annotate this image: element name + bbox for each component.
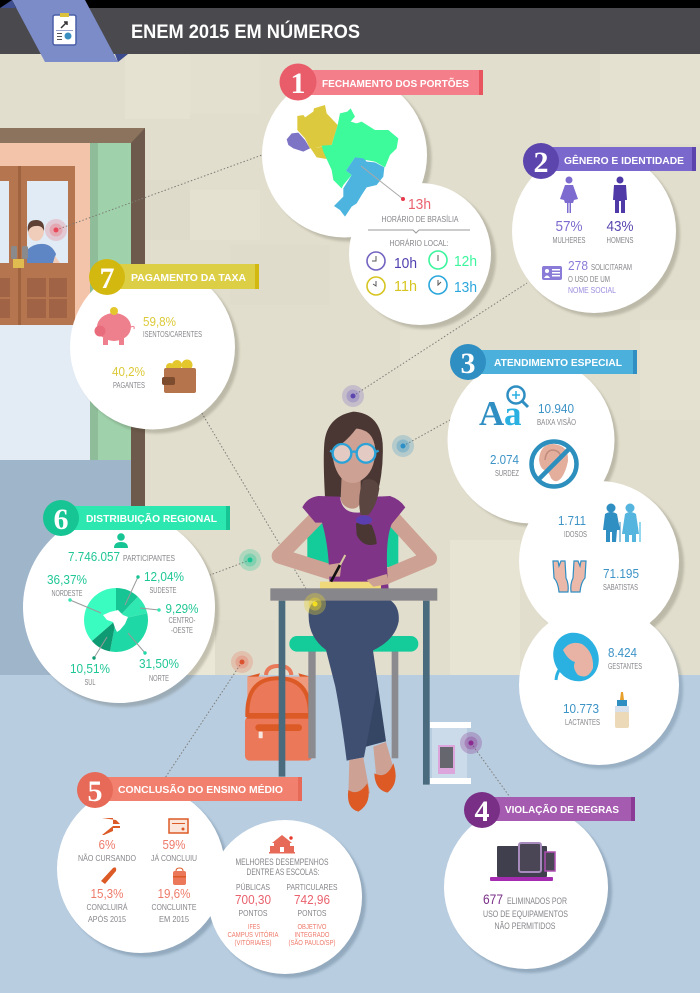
glasses <box>330 444 379 463</box>
icon: baby bottle <box>615 692 629 728</box>
nome social text: O USO DE UM <box>568 275 610 284</box>
baixa visão: 10.940 <box>538 401 574 416</box>
nome social text <box>568 258 632 295</box>
particulares: OBJETIVO <box>298 922 327 931</box>
públicas: IFES <box>248 922 260 931</box>
region labels: NORTE <box>149 674 169 683</box>
Brasília time: HORÁRIO DE BRASÍLIA <box>382 215 459 224</box>
local times <box>394 253 477 296</box>
lactantes: 10.773 <box>563 701 599 716</box>
hotspot: panel 7 <box>304 593 326 615</box>
heading 7: PAGAMENTO DA TAXA <box>131 272 246 284</box>
shirt <box>302 496 405 589</box>
idosos <box>558 513 587 539</box>
Brasília pointer <box>361 166 405 201</box>
públicas: (VITÓRIA/ES) <box>234 938 272 947</box>
melhores desempenhos: DENTRE AS ESCOLAS: <box>246 867 320 877</box>
local times: 13h <box>454 279 477 296</box>
eliminados text: USO DE EQUIPAMENTOS <box>483 909 568 919</box>
heading 1: 1 <box>290 67 306 100</box>
concluinte em 2015 <box>152 886 197 924</box>
particulares: PONTOS <box>298 908 327 918</box>
surdez <box>490 452 519 478</box>
header bar <box>0 0 700 62</box>
panel 2: gênero e identidade <box>512 143 696 317</box>
gender figures: 43% <box>606 218 634 235</box>
Brasília time: HORÁRIO LOCAL: <box>390 239 448 248</box>
region labels: 12,04% <box>144 569 184 584</box>
panel 7: pagamento da taxa <box>70 259 259 434</box>
sabatistas: 71.195 <box>603 566 639 581</box>
legs and shoes <box>348 742 396 812</box>
nome social text: SOLICITARAM <box>591 263 632 272</box>
local times: 10h <box>394 255 417 272</box>
hair fringe <box>329 418 380 452</box>
nome social text: NOME SOCIAL <box>568 286 616 295</box>
concluinte em 2015: EM 2015 <box>159 914 189 924</box>
hotspot: panel 3 <box>392 435 414 457</box>
region labels: 10,51% <box>70 661 110 676</box>
não cursando: NÃO CURSANDO <box>78 853 136 863</box>
icon: exit door <box>102 818 120 835</box>
particulares <box>286 882 338 947</box>
region labels <box>47 569 199 687</box>
icon: laptop, tablet and phone <box>490 843 555 881</box>
pie chart <box>84 588 148 652</box>
já concluiu <box>151 837 197 863</box>
region labels: -OESTE <box>171 626 193 635</box>
já concluiu: 59% <box>162 837 186 852</box>
region labels: 31,50% <box>139 656 179 671</box>
panel 1: fechamento dos portões <box>262 64 496 329</box>
hotspot: panel 6 <box>239 549 261 571</box>
isentos/carentes: 59,8% <box>143 314 176 329</box>
heading 4: 4 <box>474 795 490 828</box>
neck and face <box>332 428 375 509</box>
heading 4: VIOLAÇÃO DE REGRAS <box>505 803 619 816</box>
sabatistas <box>603 566 639 592</box>
region labels: SUL <box>84 678 96 687</box>
panel 3: atendimento especial <box>448 344 684 769</box>
pie leader lines <box>68 575 161 660</box>
concluinte em 2015: 19,6% <box>158 886 191 901</box>
hotspot: panel 4 <box>460 732 482 754</box>
hotspot: panel 1 <box>45 219 67 241</box>
particulares: PARTICULARES <box>286 882 338 892</box>
públicas: CAMPUS VITÓRIA <box>228 930 278 939</box>
heading 4 <box>464 792 635 828</box>
eliminados text: NÃO PERMITIDOS <box>494 921 556 931</box>
isentos/carentes <box>143 314 202 339</box>
region labels: 9,29% <box>166 601 199 616</box>
heading 7 <box>89 259 259 295</box>
concluirá após 2015: APÓS 2015 <box>88 914 126 924</box>
icon: pen <box>101 867 116 884</box>
gender figures <box>552 218 634 245</box>
surdez: 2.074 <box>490 452 519 467</box>
icon: wallet with coins <box>162 360 196 393</box>
hotspots <box>45 219 482 754</box>
desk <box>270 588 437 785</box>
pagantes: PAGANTES <box>113 381 145 390</box>
heading 5: 5 <box>88 775 102 808</box>
sabatistas: SABATISTAS <box>603 583 638 592</box>
isentos/carentes: ISENTOS/CARENTES <box>143 330 202 339</box>
icon: certificate <box>169 819 188 833</box>
eliminados text: 677 <box>483 891 503 907</box>
icon: clipboard <box>53 13 76 45</box>
nome social text: 278 <box>568 258 588 273</box>
Brasília time: 13h <box>408 196 431 213</box>
pagantes <box>112 364 145 390</box>
region labels: 36,37% <box>47 572 87 587</box>
concluirá após 2015 <box>86 886 128 924</box>
heading 2 <box>523 143 696 179</box>
icon: praying hands <box>553 561 586 592</box>
participantes <box>68 549 175 564</box>
heading 2: GÊNERO E IDENTIDADE <box>564 154 684 167</box>
icon: crossed ear <box>532 442 576 486</box>
baixa visão <box>537 401 576 427</box>
panel 6: distribuição regional <box>23 500 230 707</box>
particulares: INTEGRADO <box>294 930 330 939</box>
lactantes <box>563 701 600 727</box>
icon: Aa magnifier: a <box>504 394 522 433</box>
particulares: (SÃO PAULO/SP) <box>288 938 336 947</box>
heading 5: CONCLUSÃO DO ENSINO MÉDIO <box>118 783 283 796</box>
gender figures: HOMENS <box>606 236 634 245</box>
participantes: 7.746.057 <box>68 549 120 564</box>
gender figures: 57% <box>556 218 582 235</box>
heading 6: DISTRIBUIÇÃO REGIONAL <box>86 512 218 525</box>
title: ENEM 2015 EM NÚMEROS <box>131 21 360 43</box>
local times: 11h <box>394 278 417 295</box>
locker with phone <box>430 722 471 784</box>
idosos: IDOSOS <box>564 530 587 539</box>
não cursando <box>78 837 136 863</box>
region labels: SUDESTE <box>150 586 176 595</box>
heading 6 <box>43 500 230 536</box>
já concluiu: JÁ CONCLUIU <box>151 853 197 863</box>
pagantes: 40,2% <box>112 364 145 379</box>
hotspot: panel 5 <box>231 651 253 673</box>
door and entrance <box>0 128 145 675</box>
padlock <box>11 246 28 268</box>
heading 5 <box>77 772 302 808</box>
person behind the gate <box>27 220 60 263</box>
student illustration <box>245 412 437 812</box>
icon: piggy bank <box>94 307 134 345</box>
dotted connector lines <box>56 155 527 800</box>
participantes: PARTICIPANTES <box>123 554 175 563</box>
gestantes: GESTANTES <box>608 662 642 671</box>
eliminados text: ELIMINADOS POR <box>507 896 567 906</box>
map of Brazil by time zone <box>287 105 398 217</box>
backpack <box>245 666 312 761</box>
gender figures: MULHERES <box>552 236 586 245</box>
icon: Aa magnifier: A <box>479 394 505 433</box>
eliminados text <box>483 891 568 931</box>
panel 5: conclusão do ensino médio <box>57 772 366 978</box>
concluirá após 2015: CONCLUIRÁ <box>86 902 128 912</box>
gestantes <box>608 645 642 671</box>
heading 1: FECHAMENTO DOS PORTÕES <box>322 77 469 90</box>
heading 7: 7 <box>100 262 114 295</box>
paper, hand and pencil <box>320 555 389 589</box>
icon: fetus <box>544 624 608 690</box>
públicas: PÚBLICAS <box>236 882 270 892</box>
mini map of Brazil <box>103 610 128 632</box>
heading 3: 3 <box>460 347 476 380</box>
não cursando: 6% <box>98 837 116 852</box>
melhores desempenhos: MELHORES DESEMPENHOS <box>236 857 328 867</box>
icon: ID card <box>542 266 562 280</box>
braid <box>356 479 379 545</box>
públicas <box>228 882 278 947</box>
icon: woman <box>560 176 578 213</box>
icon: backpack <box>173 868 186 885</box>
local times: 12h <box>454 253 477 270</box>
heading 3: ATENDIMENTO ESPECIAL <box>494 357 623 369</box>
jeans <box>309 600 399 761</box>
heading 2: 2 <box>534 146 548 179</box>
gestantes: 8.424 <box>608 645 637 660</box>
baixa visão: BAIXA VISÃO <box>537 418 576 427</box>
hotspot: panel 2 <box>342 385 364 407</box>
Brasília time <box>368 196 470 248</box>
icon: person <box>114 533 128 548</box>
públicas: 700,30 <box>235 892 271 907</box>
lactantes: LACTANTES <box>565 718 600 727</box>
icon: Aa magnifier <box>479 386 528 433</box>
surdez: SURDEZ <box>495 469 519 478</box>
hair back <box>324 412 383 513</box>
region labels: CENTRO- <box>168 616 196 625</box>
clocks <box>367 251 447 295</box>
heading 3 <box>450 344 637 380</box>
particulares: 742,96 <box>294 892 330 907</box>
icon: elderly couple <box>603 504 640 542</box>
panel 4: violação de regras <box>444 792 635 973</box>
melhores desempenhos <box>236 857 328 877</box>
chair <box>289 523 418 758</box>
region labels: NORDESTE <box>52 589 82 598</box>
heading 6: 6 <box>54 503 68 536</box>
públicas: PONTOS <box>238 908 268 918</box>
concluinte em 2015: CONCLUINTE <box>152 902 197 912</box>
concluirá após 2015: 15,3% <box>90 886 124 901</box>
heading 1 <box>280 64 483 100</box>
icon: man <box>613 176 627 213</box>
arms <box>279 515 429 578</box>
idosos: 1.711 <box>558 513 586 528</box>
icon: school <box>269 835 295 854</box>
